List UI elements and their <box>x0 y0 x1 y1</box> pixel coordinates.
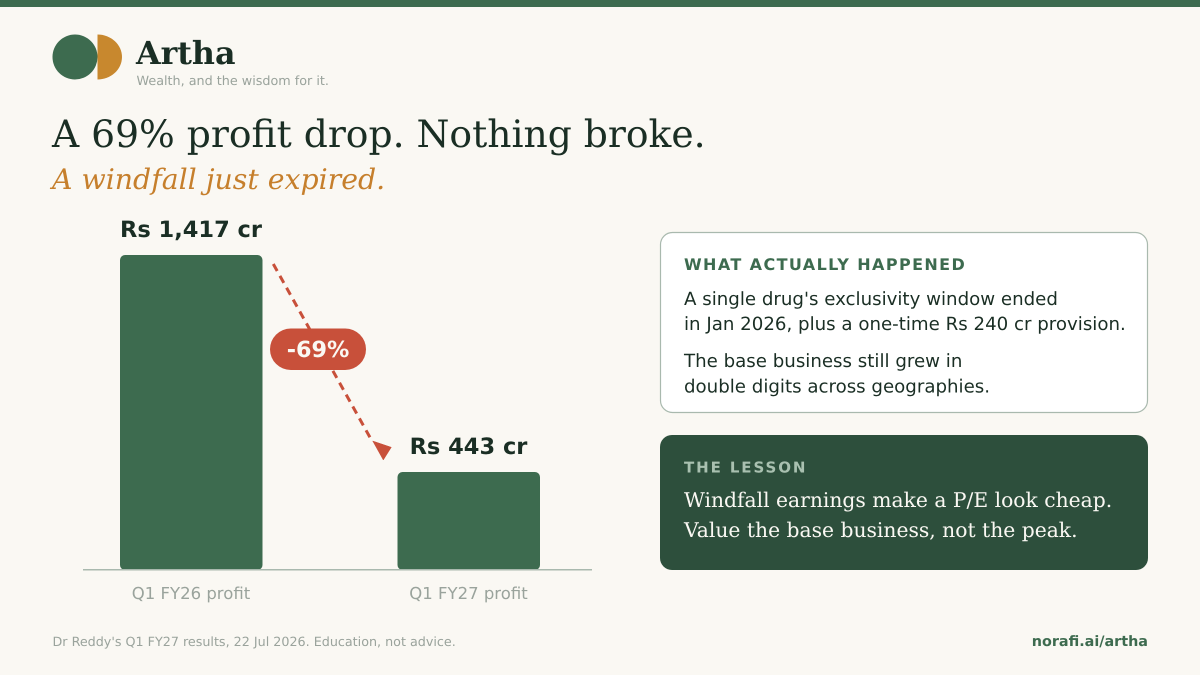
bar: Q1 FY26 <box>120 255 262 570</box>
panel heading: WHAT ACTUALLY HAPPENED <box>684 255 966 274</box>
badge: -69% <box>270 328 366 370</box>
lesson text <box>683 488 1112 542</box>
panel body text: double digits across geographies. <box>684 376 990 398</box>
axis label: Q1 FY26: Q1 FY26 profit <box>132 584 251 603</box>
panel body text <box>683 289 1126 398</box>
logo <box>52 34 122 80</box>
subtitle: A windfall just expired. <box>49 163 385 196</box>
top accent bar <box>0 0 1200 7</box>
lesson text: Windfall earnings make a P/E look cheap. <box>684 488 1112 512</box>
arrow: profit decline <box>273 264 391 460</box>
site link: norafi.ai/artha <box>1032 634 1148 650</box>
panel: what actually happened <box>660 232 1148 412</box>
axis line <box>83 569 592 570</box>
value label: Q1 FY27: Rs 443 cr <box>410 434 528 460</box>
panel: the lesson <box>660 435 1148 570</box>
source note: Dr Reddy's Q1 FY27 results, 22 Jul 2026. Education, not advice. <box>52 634 456 649</box>
brand name: Artha <box>135 35 236 72</box>
title: A 69% profit drop. Nothing broke. <box>51 112 706 156</box>
value label: Q1 FY26: Rs 1,417 cr <box>120 217 263 243</box>
panel body text: A single drug's exclusivity window ended <box>684 289 1058 310</box>
lesson heading: THE LESSON <box>684 458 807 476</box>
panel body text: in Jan 2026, plus a one-time Rs 240 cr provision. <box>684 314 1126 335</box>
panel body text: The base business still grew in <box>683 351 962 372</box>
bar: Q1 FY27 <box>398 472 540 570</box>
lesson text: Value the base business, not the peak. <box>683 518 1078 542</box>
axis label: Q1 FY27: Q1 FY27 profit <box>409 584 528 603</box>
bar chart <box>83 217 592 603</box>
badge: -69%: -69% <box>287 337 349 363</box>
brand tagline: Wealth, and the wisdom for it. <box>136 74 329 89</box>
